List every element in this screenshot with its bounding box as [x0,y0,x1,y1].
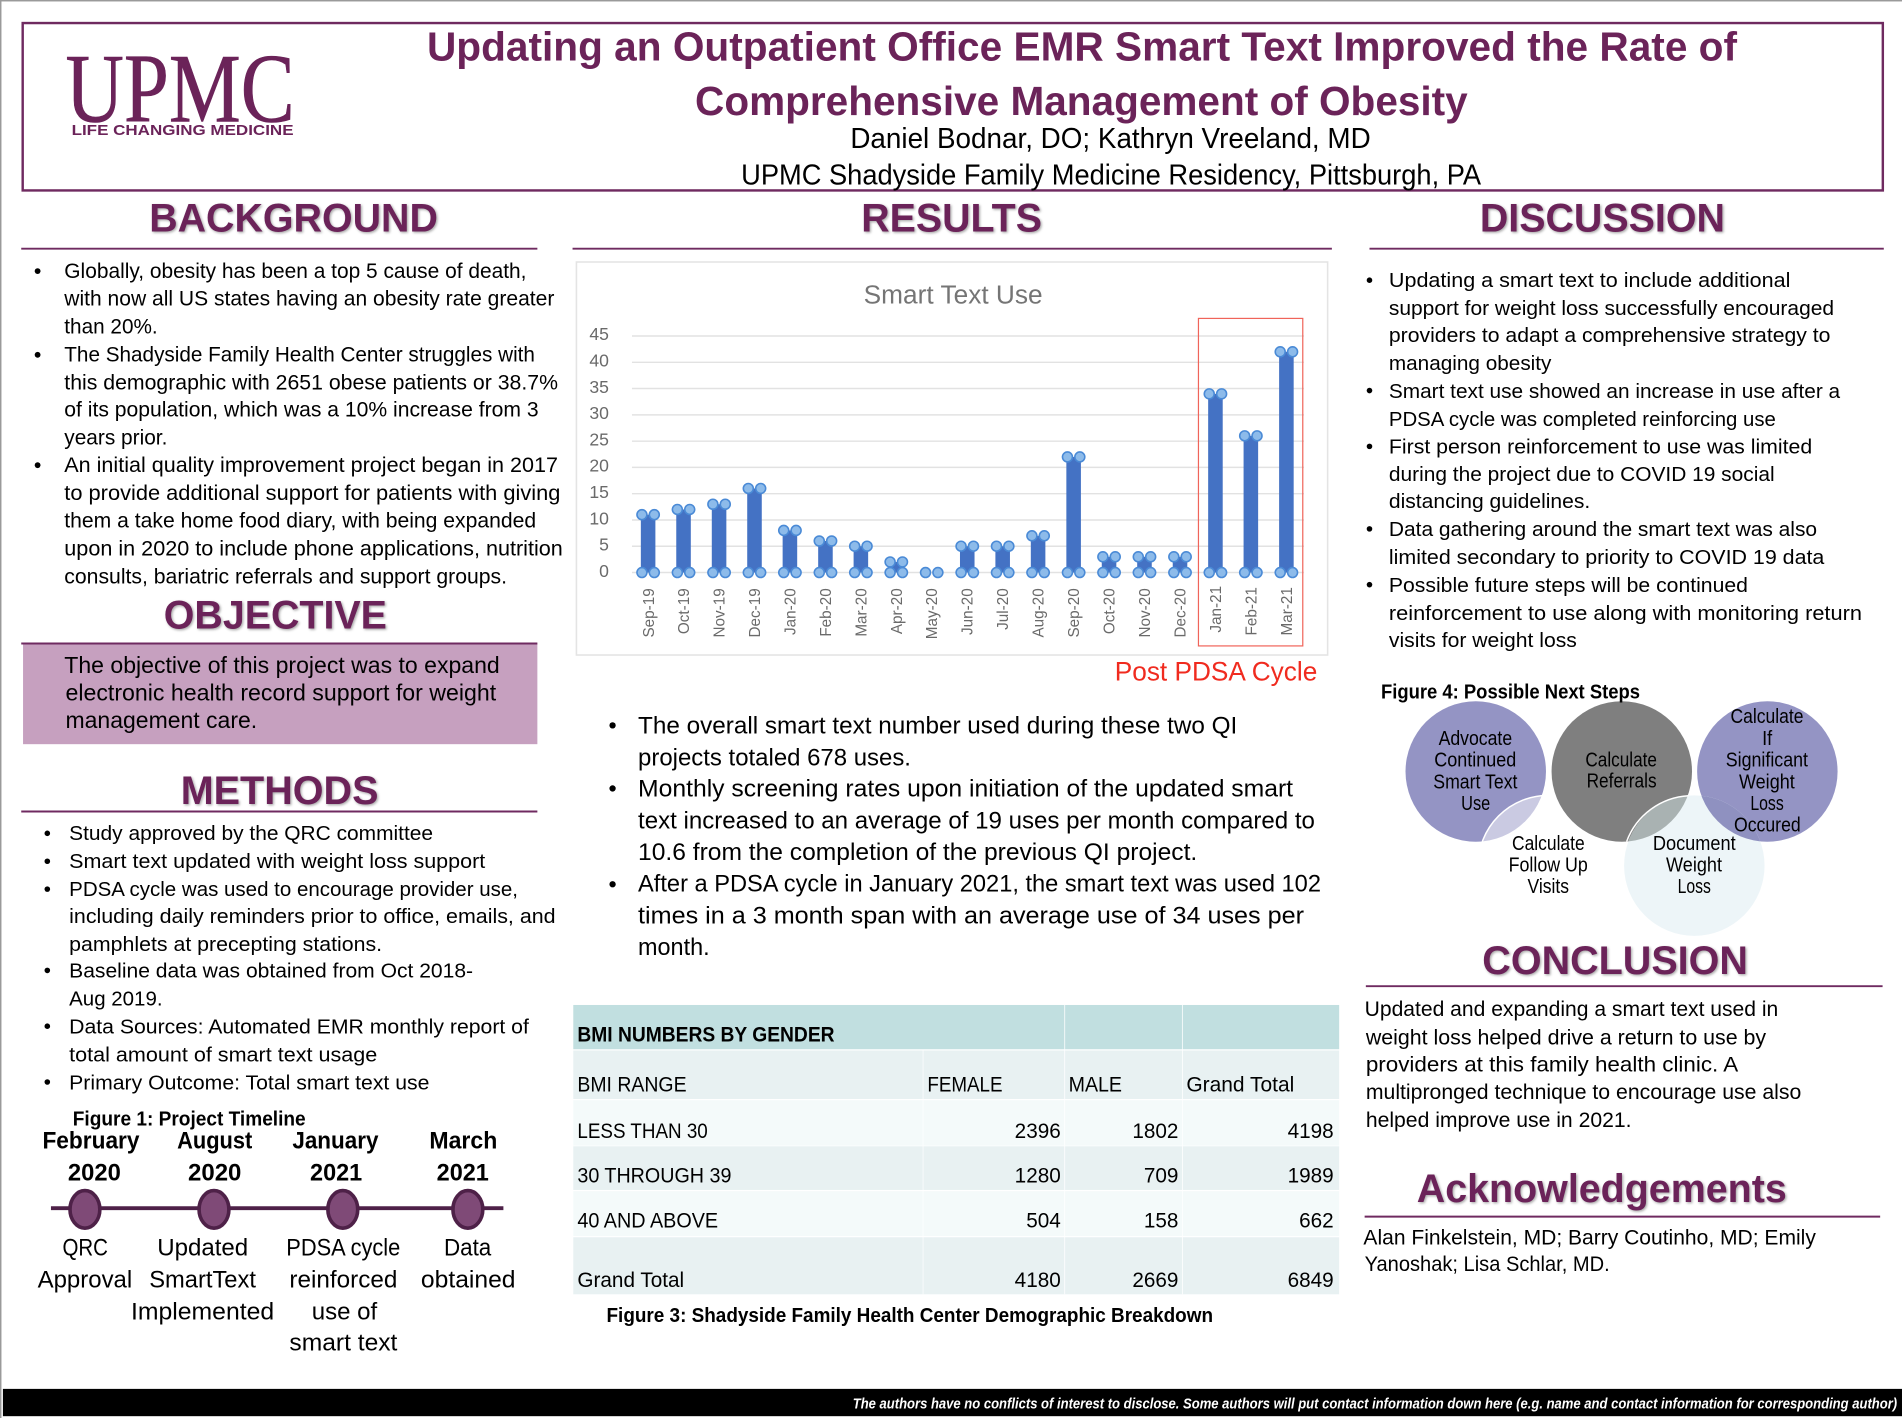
table: BMI numbers by gender: 2669 [1132,1268,1178,1292]
methods bullet text: Baseline data was obtained from Oct 2018- [69,960,473,983]
circle labels: Calculate [1512,833,1585,855]
methods bullet text [45,822,556,1094]
table: BMI numbers by gender: 6849 [1288,1268,1334,1292]
post PDSA label: Post PDSA Cycle [1115,656,1317,686]
results bullet text: After a PDSA cycle in January 2021, the smart text was used 102 [638,871,1321,898]
circle labels: Follow Up [1509,855,1588,877]
panel: acknowledgements [1363,1167,1880,1276]
timeline event labels: Data [444,1234,492,1261]
circle labels: Occured [1734,815,1801,837]
timeline dates: February [42,1128,140,1155]
timeline line and nodes [51,1191,503,1228]
table: BMI numbers by gender: BMI NUMBERS BY GENDER [577,1022,835,1046]
results bullet text: projects totaled 678 uses. [638,744,911,771]
background bullet text: them a take home food diary, with being expanded [64,509,536,533]
table: BMI numbers by gender: MALE [1069,1073,1122,1097]
acknowledgement names: Alan Finkelstein, MD; Barry Coutinho, MD; Emily [1363,1226,1816,1250]
timeline event labels: Approval [38,1267,132,1294]
background bullet text: upon in 2020 to include phone applications, nutrition [64,537,563,561]
x-axis labels: Jul-20 [995,588,1012,630]
figure 1 caption: Figure 1: Project Timeline [73,1109,306,1131]
table: BMI numbers by gender: Grand Total [577,1268,684,1292]
table: BMI numbers by gender: BMI RANGE [577,1073,687,1097]
header banner [23,23,1883,191]
timeline event labels: use of [312,1298,378,1325]
methods bullet text: including daily reminders prior to office, emails, and [69,905,556,928]
methods bullet text: Smart text updated with weight loss support [69,850,485,873]
background bullet text: with now all US states having an obesity rate greater [63,287,554,311]
y-axis labels: 40 [589,351,609,371]
figure 4: possible next steps diagram [1381,682,1838,936]
authors and affiliation: Daniel Bodnar, DO; Kathryn Vreeland, MD [850,123,1371,155]
methods bullet text: Primary Outcome: Total smart text use [69,1071,429,1094]
table: BMI numbers by gender: 2396 [1015,1119,1061,1143]
results bullet text: Monthly screening rates upon initiation of the updated smart [638,775,1293,802]
chart: smart text use [576,262,1328,686]
figure 1: project timeline [38,1109,516,1357]
discussion bullet text: reinforcement to use along with monitoring return [1389,602,1862,625]
circle labels: Loss [1678,876,1711,898]
heading: background: BACKGROUND [149,197,438,241]
methods bullet text: Study approved by the QRC committee [69,822,433,845]
circle labels: Calculate [1730,706,1803,728]
table: BMI numbers by gender: 30 THROUGH 39 [577,1164,731,1188]
circle labels: Loss [1750,793,1784,815]
x-axis labels [641,586,1296,639]
x-axis labels: Jun-20 [960,588,977,635]
x-axis labels: Feb-20 [818,588,835,637]
circle labels: Document [1653,833,1736,855]
circle labels: Continued [1434,750,1516,772]
panel: methods [21,769,556,1094]
panel: discussion [1367,197,1884,652]
table: BMI numbers by gender: 40 AND ABOVE [577,1209,718,1233]
x-axis labels: Oct-19 [676,588,693,634]
x-axis labels: Mar-21 [1279,587,1296,635]
table: BMI numbers by gender: 4198 [1288,1119,1334,1143]
results bullet text: times in a 3 month span with an average use of 34 uses per [638,903,1304,930]
timeline dates: 2020 [188,1159,241,1186]
discussion bullet text: Possible future steps will be continued [1389,574,1748,597]
x-axis labels: Jan-21 [1208,586,1225,633]
circle labels: Smart Text [1433,771,1518,793]
circle labels: Advocate [1439,728,1512,750]
objective text: The objective of this project was to expand [64,652,500,678]
title: Comprehensive Management of Obesity [695,78,1468,124]
methods bullet text: Data Sources: Automated EMR monthly report of [69,1015,529,1038]
conclusion text: helped improve use in 2021. [1366,1108,1631,1132]
y-axis labels: 10 [589,508,609,528]
x-axis labels: Sep-19 [641,588,658,638]
discussion bullet text: distancing guidelines. [1389,490,1590,513]
methods bullet text: total amount of smart text usage [69,1043,377,1066]
background bullet text: The Shadyside Family Health Center struggles with [64,342,535,366]
discussion bullet text: First person reinforcement to use was limited [1389,436,1812,459]
panel: objective [21,593,537,744]
x-axis labels: Nov-19 [712,588,729,638]
background bullet text: to provide additional support for patients with giving [64,481,560,505]
circle labels: Significant [1726,750,1808,772]
timeline event labels: reinforced [289,1267,397,1294]
methods bullet text: pamphlets at precepting stations. [69,933,382,956]
circle labels: Weight [1739,771,1795,793]
methods bullet text: Aug 2019. [69,988,163,1011]
methods bullet text: PDSA cycle was used to encourage provider use, [69,878,518,901]
heading: discussion: DISCUSSION [1480,197,1725,241]
background bullet text [35,259,563,588]
results bullet text [609,712,1321,961]
circles [1406,701,1838,936]
discussion bullet text: providers to adapt a comprehensive strategy to [1389,324,1830,347]
authors and affiliation: UPMC Shadyside Family Medicine Residency, Pittsburgh, PA [741,159,1482,191]
table: BMI numbers by gender: 1802 [1132,1119,1178,1143]
y-axis labels: 20 [589,456,609,476]
x-axis labels: Nov-20 [1137,588,1154,638]
table: BMI numbers by gender: 504 [1026,1209,1061,1233]
discussion bullet text: limited secondary to priority to COVID 19 data [1389,546,1825,569]
panel: background [21,197,563,588]
background bullet text: An initial quality improvement project began in 2017 [64,453,558,477]
circle labels: Use [1461,793,1490,815]
x-axis labels: Dec-20 [1172,588,1189,638]
heading: acknowledgements: Acknowledgements [1417,1167,1787,1211]
table: BMI numbers by gender: LESS THAN 30 [577,1119,708,1143]
results bullet text: 10.6 from the completion of the previous QI project. [638,839,1197,866]
logo: UPMC: LIFE CHANGING MEDICINE [72,122,294,139]
figure 4 caption: Figure 4: Possible Next Steps [1381,682,1640,704]
discussion bullet text: Data gathering around the smart text was also [1389,518,1817,541]
x-axis labels: Aug-20 [1031,588,1048,638]
x-axis labels: Dec-19 [747,588,764,638]
y-axis labels [589,324,609,581]
heading: methods: METHODS [181,769,378,813]
conclusion text: providers at this family health clinic. A [1366,1053,1739,1077]
circle labels: Weight [1666,855,1722,877]
table: BMI numbers by gender: 709 [1144,1164,1178,1188]
discussion bullet text: Smart text use showed an increase in use after a [1389,380,1841,403]
heading: results: RESULTS [861,197,1042,241]
y-axis labels: 15 [589,482,609,502]
conclusion text [1365,997,1801,1132]
conclusion text: Updated and expanding a smart text used in [1365,997,1778,1021]
results bullet text: text increased to an average of 19 uses per month compared to [638,807,1315,834]
circle labels [1433,706,1808,898]
title: Updating an Outpatient Office EMR Smart Text Improved the Rate of [427,24,1737,70]
heading: conclusion: CONCLUSION [1482,939,1748,983]
timeline event labels: PDSA cycle [286,1234,400,1261]
post PDSA highlight box [1198,318,1303,646]
x-axis labels: Oct-20 [1102,588,1119,634]
footer bar [3,1389,1902,1416]
circle labels: Referrals [1587,771,1657,793]
authors and affiliation [741,123,1482,191]
table: BMI numbers by gender: 662 [1299,1209,1334,1233]
background bullet text: this demographic with 2651 obese patients or 38.7% [64,370,558,394]
discussion bullet text: managing obesity [1389,352,1552,375]
timeline dates: 2021 [310,1159,362,1186]
x-axis labels: Feb-21 [1243,587,1260,635]
timeline dates: August [177,1128,252,1155]
table: BMI numbers by gender: FEMALE [927,1073,1003,1097]
x-axis labels: Sep-20 [1066,588,1083,638]
conclusion text: weight loss helped drive a return to use by [1365,1025,1766,1049]
timeline event labels [38,1234,516,1357]
circle labels: Calculate [1585,750,1657,772]
background bullet text: years prior. [64,426,167,450]
chart title: Smart Text Use [864,281,1043,309]
panel: conclusion [1365,939,1883,1132]
acknowledgement names [1363,1226,1816,1276]
x-axis labels: Jan-20 [782,588,799,635]
discussion bullet text [1367,269,1862,652]
table: BMI numbers by gender: 1280 [1015,1164,1061,1188]
results bullet text: The overall smart text number used during these two QI [638,712,1237,739]
timeline dates [42,1128,497,1186]
timeline event labels: QRC [62,1234,108,1261]
title [427,24,1737,124]
x-axis labels: Mar-20 [853,588,870,637]
discussion bullet text: support for weight loss successfully encouraged [1389,297,1834,320]
table: BMI numbers by gender: 158 [1144,1209,1178,1233]
y-axis labels: 5 [599,534,609,554]
background bullet text: than 20%. [64,315,158,339]
objective text: electronic health record support for weight [66,680,497,706]
y-axis labels: 0 [599,561,609,581]
timeline dates: March [429,1128,497,1155]
x-axis labels: May-20 [924,588,941,639]
figure 3 caption: Figure 3: Shadyside Family Health Center Demographic Breakdown [607,1305,1213,1327]
y-axis labels: 45 [589,324,609,344]
objective text [64,652,500,733]
table: BMI numbers by gender [573,1005,1339,1294]
panel: results [573,197,1339,1327]
discussion bullet text: PDSA cycle was completed reinforcing use [1389,408,1776,431]
timeline event labels: smart text [289,1330,398,1357]
bars with markers [637,347,1298,578]
conclusion text: multipronged technique to encourage use also [1366,1080,1801,1104]
discussion bullet text: visits for weight loss [1389,629,1577,652]
table: BMI numbers by gender: Grand Total [1186,1073,1294,1097]
table: BMI numbers by gender: 4180 [1015,1268,1061,1292]
acknowledgement names: Yanoshak; Lisa Schlar, MD. [1365,1252,1610,1276]
discussion bullet text: during the project due to COVID 19 social [1389,463,1775,486]
timeline event labels: Updated [157,1234,248,1261]
logo: UPMC: UPMC [66,34,295,143]
circle labels: Visits [1528,876,1569,898]
circle labels: If [1762,728,1773,750]
background bullet text: of its population, which was a 10% increase from 3 [64,398,539,422]
discussion bullet text: Updating a smart text to include additional [1389,269,1790,292]
y-axis labels: 30 [589,403,609,423]
timeline dates: 2020 [68,1159,121,1186]
background bullet text: consults, bariatric referrals and support groups. [64,564,507,588]
y-axis labels: 25 [589,429,609,449]
heading: objective: OBJECTIVE [164,593,387,637]
timeline dates: 2021 [437,1159,489,1186]
x-axis labels: Apr-20 [889,588,906,634]
objective text: management care. [66,707,257,733]
table: BMI numbers by gender: 1989 [1288,1164,1334,1188]
timeline event labels: SmartText [149,1267,256,1294]
y-axis labels: 35 [589,377,609,397]
timeline event labels: obtained [421,1267,516,1294]
timeline event labels: Implemented [131,1299,274,1326]
timeline dates: January [292,1128,379,1155]
background bullet text: Globally, obesity has been a top 5 cause of death, [64,259,526,283]
results bullet text: month. [638,934,710,961]
